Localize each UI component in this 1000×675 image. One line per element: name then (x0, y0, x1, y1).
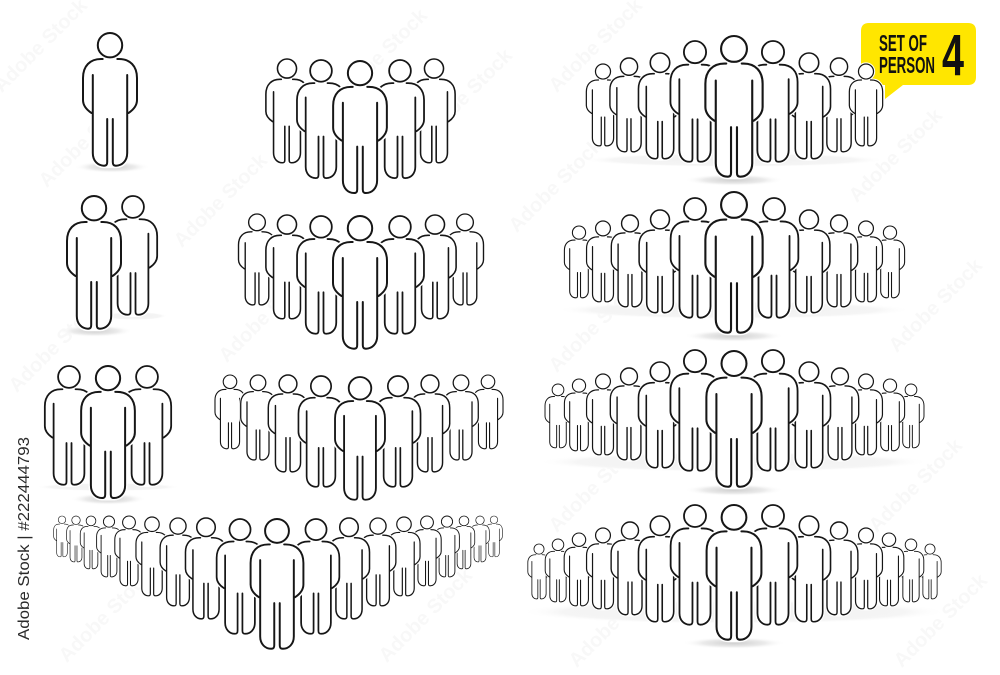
group: nine people (215, 375, 503, 500)
watermark pattern: Adobe Stock (505, 134, 607, 237)
watermark pattern: Adobe Stock (845, 104, 947, 207)
watermark pattern: Adobe Stock (415, 44, 517, 147)
watermark pattern: Adobe Stock (885, 254, 987, 357)
watermark pattern: Adobe Stock (55, 564, 157, 667)
group: thirteen people, right column (538, 350, 930, 496)
badge: set of person 4: PERSON (879, 52, 935, 78)
group: seven people (239, 214, 483, 349)
group: eleven people, right column (556, 192, 912, 342)
group: three people (36, 366, 180, 505)
watermark pattern: Adobe Stock (215, 264, 317, 367)
group: fifteen people, right column (520, 505, 948, 649)
badge: set of person 4 (849, 23, 976, 146)
watermark pattern: Adobe Stock (545, 274, 647, 377)
watermark pattern: Adobe Stock (545, 434, 647, 537)
badge: set of person 4: 4 (942, 23, 964, 88)
watermark pattern: Adobe Stock (865, 434, 967, 537)
watermark pattern: Adobe Stock (330, 4, 432, 107)
group: two people (57, 196, 167, 337)
group: one person (74, 33, 150, 173)
group: five people (266, 59, 455, 193)
badge: set of person 4: SET OF (879, 30, 927, 56)
source credit: Adobe Stock | #222444793 (16, 437, 33, 640)
watermark pattern: Adobe Stock (170, 149, 272, 252)
watermark pattern: Adobe Stock (375, 564, 477, 667)
watermark pattern: Adobe Stock (890, 569, 992, 672)
watermark pattern: Adobe Stock (35, 89, 137, 192)
watermark pattern: Adobe Stock (565, 569, 667, 672)
group: nineteen people in V formation (54, 516, 502, 649)
watermark pattern: Adobe Stock (5, 294, 107, 397)
group: nine people, right column (582, 36, 886, 186)
